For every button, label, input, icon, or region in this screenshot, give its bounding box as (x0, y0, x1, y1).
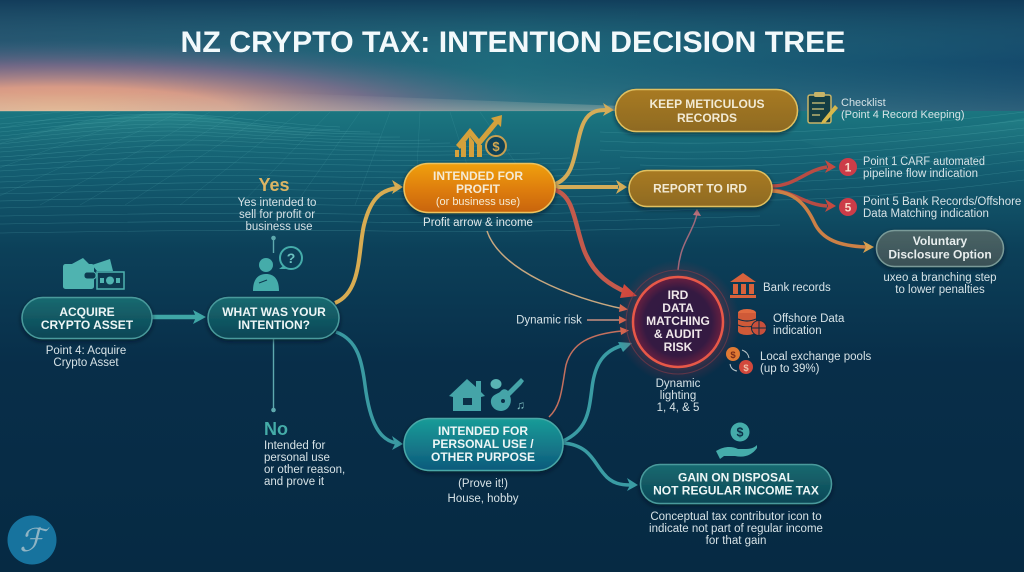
node: acquire crypto asset: ACQUIRE (59, 305, 115, 319)
background: sky and ocean (0, 0, 1024, 342)
icon: profit chart with coin: $ (492, 139, 500, 154)
icon: logo badge (8, 516, 56, 564)
icon: logo badge: ℱ (19, 522, 50, 558)
text: exchange pools: Local exchange pools (760, 351, 871, 363)
badge: point 5: 5 (845, 200, 852, 214)
text: point 1: Point 1 CARF automated (863, 156, 985, 168)
text: no branch: and prove it (264, 476, 325, 488)
text: dynamic lighting: 1, 4, & 5 (657, 402, 699, 414)
badge: point 1 (839, 158, 857, 176)
text: no branch: No (264, 419, 288, 439)
text: profit note: Profit arrow & income (423, 217, 533, 229)
arrow: profit to report (555, 180, 627, 194)
node: gain on disposal (640, 464, 832, 504)
text: yes branch (238, 175, 316, 233)
node: intended for profit: INTENDED FOR (433, 169, 523, 183)
node: intended for personal use (404, 418, 563, 470)
text: dynamic risk: Dynamic risk (516, 314, 582, 326)
icon: house (449, 379, 485, 411)
text: personal use note: (Prove it!) (458, 478, 508, 490)
node: intended for profit (404, 164, 555, 212)
text: checklist note: (Point 4 Record Keeping) (841, 109, 965, 121)
text: gain note: Conceptual tax contributor icon to (650, 511, 822, 523)
arrow: personal use to gain (563, 443, 638, 491)
node: intended for personal use: INTENDED FOR (438, 424, 528, 438)
node: acquire crypto asset (22, 298, 152, 338)
node: voluntary disclosure option (876, 230, 1004, 266)
arrow: personal use thin line to risk (549, 327, 629, 417)
node: ird data matching and audit risk: MATCHING (646, 314, 710, 328)
text: yes branch: business use (245, 221, 313, 233)
node: intended for personal use: PERSONAL USE / (432, 437, 534, 451)
title: NZ CRYPTO TAX: INTENTION DECISION TREE (180, 26, 845, 59)
text: no branch: personal use (264, 452, 330, 464)
icon: person thinking (253, 247, 302, 291)
icon: bank (730, 273, 756, 298)
icon: profit chart with coin (455, 115, 506, 157)
text: acquire note: Point 4: Acquire (46, 345, 126, 357)
node: keep meticulous records (616, 90, 798, 132)
node: voluntary disclosure option: Disclosure Option (888, 248, 992, 262)
text: yes branch: Yes (258, 175, 290, 195)
arrows: report to right-hand outcomes (772, 160, 874, 253)
text: offshore data (773, 313, 845, 337)
text: personal use note (448, 478, 519, 505)
node: acquire crypto asset: CRYPTO ASSET (41, 318, 134, 332)
badge: point 5 (839, 198, 857, 216)
node: what was your intention: INTENTION? (238, 318, 310, 332)
icon: exchange coins: $ (743, 363, 749, 374)
node: ird data matching and audit risk (616, 260, 740, 384)
icon: exchange coins: $ (730, 350, 736, 361)
icon: person thinking: ? (287, 250, 295, 266)
text: offshore data: Offshore Data (773, 313, 845, 325)
icon: wallet and cash (63, 258, 124, 289)
text: acquire note (46, 345, 126, 369)
text: point 1: pipeline flow indication (863, 168, 978, 180)
text: no branch (264, 419, 345, 488)
node: ird data matching and audit risk: DATA (662, 301, 694, 315)
node: keep meticulous records: KEEP METICULOUS (649, 97, 765, 111)
node: what was your intention: WHAT WAS YOUR (222, 305, 326, 319)
icon: hand with coin (716, 422, 757, 459)
icon: hand with coin: $ (737, 426, 744, 440)
node: what was your intention (208, 298, 339, 338)
arrow: personal use to risk (563, 342, 632, 441)
text: gain note (649, 511, 823, 547)
node: keep meticulous records: RECORDS (677, 111, 737, 125)
arrow: profit thin line to risk (487, 231, 628, 312)
node: voluntary disclosure option: Voluntary (913, 234, 968, 248)
text: no branch: Intended for (264, 440, 326, 452)
node: ird data matching and audit risk: IRD (668, 288, 689, 302)
node: report to ird (629, 170, 772, 206)
text: checklist note (841, 97, 965, 121)
text: checklist note: Checklist (841, 97, 886, 109)
arrow: dynamic risk (587, 316, 627, 324)
text: gain note: indicate not part of regular income (649, 523, 823, 535)
text: yes branch: sell for profit or (239, 209, 315, 221)
text: offshore data: indication (773, 325, 822, 337)
node: intended for profit: PROFIT (456, 182, 501, 196)
text: yes branch: Yes intended to (238, 197, 316, 209)
node: intended for profit: (or business use) (436, 196, 520, 208)
node: report to ird: REPORT TO IRD (653, 182, 747, 196)
text: voluntary note: uxeo a branching step (883, 272, 997, 284)
text: dynamic lighting: lighting (660, 390, 696, 402)
text: point 5: Point 5 Bank Records/Offshore (863, 196, 1021, 208)
text: dynamic lighting: Dynamic (656, 378, 701, 390)
text: exchange pools: (up to 39%) (760, 363, 820, 375)
text: personal use note: House, hobby (448, 493, 519, 505)
text: point 1 (863, 156, 985, 180)
text: gain note: for that gain (706, 535, 766, 547)
node: ird data matching and audit risk: RISK (664, 340, 693, 354)
icon: checklist (808, 92, 838, 124)
arrow: risk to report (678, 209, 701, 270)
text: point 5: Data Matching indication (863, 208, 989, 220)
text: voluntary note (883, 272, 997, 296)
text: bank records: Bank records (763, 282, 831, 294)
text: voluntary note: to lower penalties (895, 284, 985, 296)
icon: exchange coins (726, 347, 753, 374)
text: acquire note: Crypto Asset (53, 357, 119, 369)
node: gain on disposal: NOT REGULAR INCOME TAX (653, 484, 819, 498)
arrow: profit to records (555, 103, 614, 184)
node: intended for personal use: OTHER PURPOSE (431, 450, 535, 464)
node: gain on disposal: GAIN ON DISPOSAL (678, 470, 794, 484)
node: ird data matching and audit risk: & AUDIT (654, 327, 703, 341)
arrow: intention yes to profit (335, 180, 403, 303)
text: no branch: or other reason, (264, 464, 345, 476)
connector: intention stem up and down (271, 236, 276, 412)
arrow: intention no to personal use (336, 332, 403, 450)
icon: guitar and hobby: ♫ (516, 398, 525, 412)
text: point 5 (863, 196, 1021, 220)
arrow: acquire to intention (152, 310, 206, 324)
icon: offshore database (738, 309, 766, 336)
arrow: profit to risk (555, 190, 637, 298)
text: exchange pools (760, 351, 871, 375)
icon: guitar and hobby (490, 378, 525, 412)
badge: point 1: 1 (845, 160, 852, 174)
text: dynamic lighting (656, 378, 701, 414)
